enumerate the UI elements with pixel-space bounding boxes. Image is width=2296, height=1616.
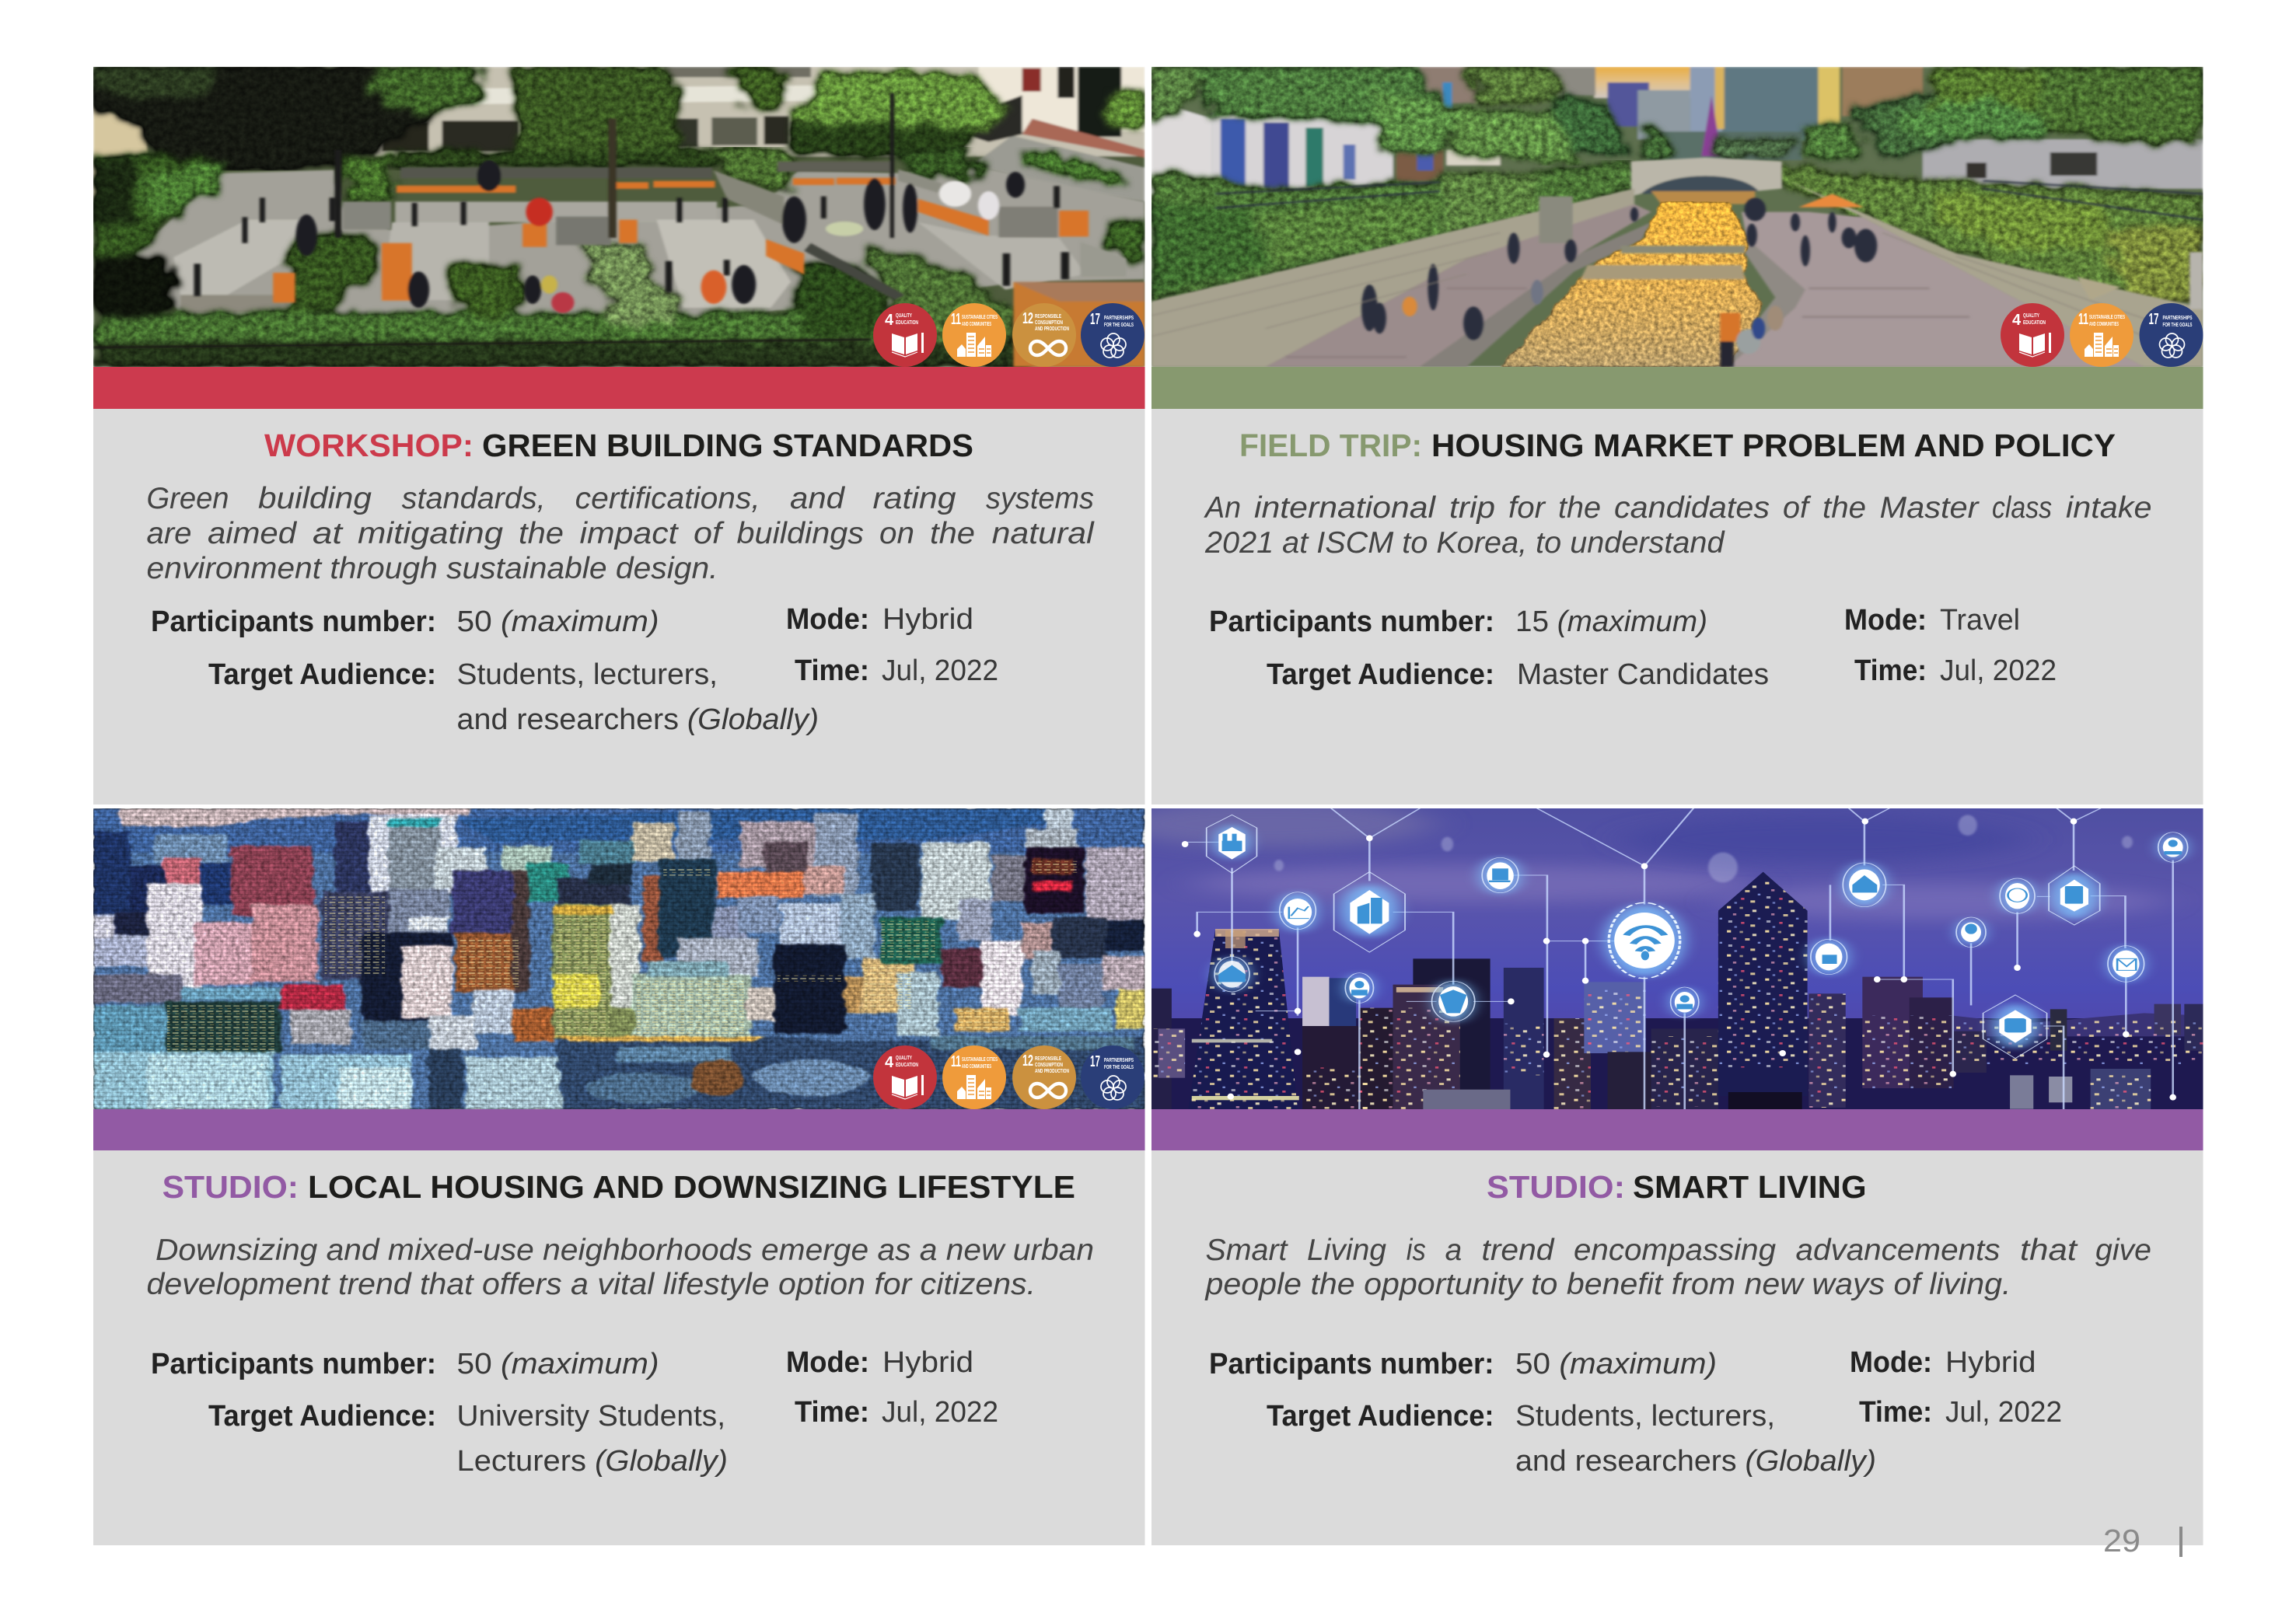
panel: field trip housing market [1151,67,2203,805]
heading: workshop: WORKSHOP: [264,428,474,463]
details: studio smart living: Hybrid [1945,1346,2036,1379]
description: field trip: the [1822,491,1866,525]
description: studio smart living: that [2020,1234,2078,1267]
details: workshop: Jul, 2022 [882,654,998,687]
details: field trip [1209,604,2057,691]
photo: dense city skyline at dusk [93,808,1145,1109]
badge: SDG 12: 12 [1022,1052,1033,1070]
badge: SDG 12 [1012,1045,1076,1109]
details: studio housing: Time: [795,1396,869,1429]
badge: SDG 17: FOR THE GOALS [2163,323,2193,328]
description: field trip: An [1204,491,1241,525]
badge: SDG 11: 11 [2078,311,2088,328]
badge: SDG 12: RESPONSIBLE [1035,1056,1061,1062]
description: studio smart living [1204,1234,2151,1301]
heading: workshop: GREEN BUILDING STANDARDS [482,428,973,463]
badge: SDG 12: AND PRODUCTION [1035,326,1069,332]
description: workshop: and [790,482,845,515]
badge: SDG 4: QUALITY [896,1056,912,1061]
description: field trip: of [1783,491,1812,525]
badge: SDG 17: 17 [1090,1053,1100,1070]
description: field trip: 2021 at ISCM to Korea, to understand [1204,526,1725,560]
description: field trip: trip [1449,491,1495,525]
details: field trip: Master Candidates [1517,658,1769,691]
description: workshop: the [930,517,975,550]
details: workshop: Target Audience: [208,658,436,691]
details: workshop [151,603,998,736]
SDG badges: field trip [2001,303,2203,367]
description: workshop: impact [580,517,680,550]
details: studio housing: University Students, [457,1400,725,1433]
details: studio housing: Target Audience: [208,1400,436,1433]
details: studio housing: 50 (maximum) [457,1348,659,1380]
badge: SDG 4: 4 [885,1054,894,1071]
details: studio smart living: 50 (maximum) [1515,1348,1717,1380]
badge: SDG 17: FOR THE GOALS [1104,1065,1134,1070]
description: workshop: aimed [208,517,297,550]
details: studio smart living: Jul, 2022 [1945,1396,2062,1429]
SDG badges: workshop [873,303,1145,367]
badge: SDG 17: PARTNERSHIPS [1104,1058,1134,1063]
description: workshop: systems [986,482,1094,515]
badge: SDG 4: 4 [885,312,894,329]
details: field trip: Target Audience: [1267,658,1494,691]
badge: SDG 4: EDUCATION [896,320,918,326]
description: studio smart living: advancements [1796,1234,2000,1267]
badge: SDG 17: PARTNERSHIPS [1104,316,1134,321]
details: field trip: Time: [1854,654,1927,687]
details: field trip: Participants number: [1209,606,1494,638]
description: studio smart living: a [1445,1234,1462,1267]
badge: SDG 11: AND COMMUNITIES [962,1064,991,1070]
description: studio smart living: trend [1482,1234,1555,1267]
description: workshop: environment through sustainable design. [146,552,718,585]
badge: SDG 11: 11 [951,1053,961,1070]
heading: field trip: HOUSING MARKET PROBLEM AND POLICY [1431,428,2116,463]
photo: smart city skyline with network icons [1151,808,2203,1109]
description: studio smart living: people the opportunity to benefit from new ways of living. [1204,1268,2011,1301]
badge: SDG 17: 17 [1090,311,1100,328]
description: workshop: buildings [737,517,864,550]
description: field trip: the [1558,491,1601,525]
badge: SDG 11 [942,303,1006,367]
badge: SDG 4: QUALITY [2023,313,2039,319]
panel: workshop green building standards [93,67,1145,805]
details: studio smart living: Participants number: [1209,1348,1494,1380]
page number: 29 [2103,1523,2140,1558]
description: studio smart living: Smart [1205,1234,1289,1267]
details: field trip: Mode: [1844,604,1927,637]
badge: SDG 11: AND COMMUNITIES [2089,322,2119,327]
description: workshop: natural [992,517,1095,550]
badge: SDG 11: SUSTAINABLE CITIES [962,1057,998,1063]
photo: courtyard garden with students [93,67,1145,367]
description: workshop: on [879,517,914,550]
description: studio smart living: Living [1307,1234,1386,1267]
details: studio housing: Lecturers (Globally) [457,1445,728,1478]
details: field trip: 15 (maximum) [1515,606,1707,638]
description: field trip [1204,491,2152,560]
details: studio housing [151,1346,998,1478]
details: field trip: Travel [1940,604,2020,637]
badge: SDG 4 [873,303,937,367]
colour band: studio housing [93,1109,1145,1150]
badge: SDG 17 [1081,1045,1145,1109]
description: workshop: mitigating [358,517,503,550]
network lines [1185,808,2173,1109]
details: workshop: Students, lecturers, [457,658,718,691]
badge: SDG 12: CONSUMPTION [1035,320,1063,326]
heading: studio smart living: STUDIO: [1487,1169,1625,1205]
details: workshop: Mode: [786,603,869,636]
badge: SDG 11: 11 [951,311,961,328]
details: studio smart living: and researchers (Globally) [1515,1445,1876,1478]
details: workshop: 50 (maximum) [457,606,659,638]
details: workshop: Participants number: [151,606,436,638]
description: workshop: are [146,517,191,550]
skyline buildings [1151,872,2203,1109]
badge: SDG 12: 12 [1022,310,1033,327]
details: workshop: Time: [795,654,869,687]
description: workshop: building [258,482,372,515]
colour band: field trip [1151,367,2203,409]
description: field trip: Master [1880,491,1980,525]
badge: SDG 17 [1081,303,1145,367]
badge: SDG 4 [873,1045,937,1109]
badge: SDG 12 [1012,303,1076,367]
photo: urban stream with walkways at sunset [1151,67,2203,367]
description: field trip: for [1508,491,1546,525]
badge: SDG 11: SUSTAINABLE CITIES [2089,315,2125,320]
description: workshop: at [313,517,344,550]
panel: studio smart living [1111,801,2203,1545]
panel: studio local housing and downsizing [93,808,1145,1545]
badge: SDG 11 [942,1045,1006,1109]
description: studio housing: development trend that offers a vital lifestyle option for citizens. [146,1268,1036,1301]
details: studio smart living: Target Audience: [1267,1400,1494,1433]
badge: SDG 4 [2001,303,2064,367]
description: workshop: certifications, [575,482,760,515]
badge: SDG 4: 4 [2012,312,2022,329]
description: workshop: of [694,517,725,550]
details: studio smart living: Students, lecturers, [1515,1400,1775,1433]
description: workshop: the [519,517,564,550]
description: field trip: class [1992,491,2052,525]
page number [2103,1523,2182,1558]
heading: studio housing: LOCAL HOUSING AND DOWNSIZING LIFESTYLE [308,1169,1075,1205]
description: studio smart living: is [1407,1234,1426,1267]
colour band: workshop [93,367,1145,409]
description: studio housing: Downsizing and mixed-use neighborhoods emerge as a new urban [156,1234,1094,1267]
heading: studio housing: STUDIO: [163,1169,299,1205]
description: studio smart living: encompassing [1574,1234,1776,1267]
badge: SDG 17: FOR THE GOALS [1104,323,1134,328]
details: field trip: Jul, 2022 [1940,654,2057,687]
details: studio housing: Jul, 2022 [882,1396,998,1429]
badge: SDG 4: EDUCATION [2023,320,2046,326]
description: workshop: rating [872,482,956,515]
badge: SDG 12: CONSUMPTION [1035,1063,1063,1068]
badge: SDG 11: SUSTAINABLE CITIES [962,315,998,320]
SDG badges: studio housing [873,1045,1145,1109]
details: studio smart living: Mode: [1850,1346,1932,1379]
badge: SDG 12: AND PRODUCTION [1035,1069,1069,1074]
badge: SDG 4: EDUCATION [896,1063,918,1068]
badge: SDG 17 [2140,303,2203,367]
heading: studio smart living: SMART LIVING [1633,1169,1867,1205]
network icon nodes [1207,815,2188,1059]
badge: SDG 17: 17 [2149,311,2158,328]
icon: wifi [1627,927,1665,960]
details: studio housing: Hybrid [882,1346,973,1379]
description: field trip: international [1254,491,1436,525]
heading: field trip: FIELD TRIP: [1239,428,1422,463]
description: field trip: candidates [1614,491,1770,525]
badge: SDG 11 [2070,303,2133,367]
details: studio smart living: Time: [1859,1396,1932,1429]
badge: SDG 11: AND COMMUNITIES [962,322,991,327]
colour band: studio smart living [1151,1109,2203,1150]
details: studio smart living [1209,1346,2062,1478]
description: studio smart living: give [2095,1234,2151,1267]
description: workshop [146,482,1095,585]
details: workshop: and researchers (Globally) [457,703,819,736]
badge: SDG 17: PARTNERSHIPS [2163,316,2193,321]
details: studio housing: Mode: [786,1346,869,1379]
description: workshop: Green [146,482,229,515]
details: studio housing: Participants number: [151,1348,436,1380]
description: workshop: standards, [402,482,546,515]
details: workshop: Hybrid [882,603,973,636]
description: studio housing [146,1234,1094,1301]
badge: SDG 12: RESPONSIBLE [1035,314,1061,319]
badge: SDG 4: QUALITY [896,313,912,319]
description: field trip: intake [2066,491,2152,525]
